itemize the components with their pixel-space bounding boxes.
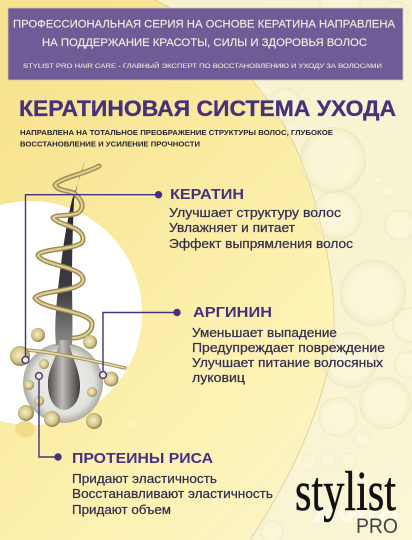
connector: arginine	[100, 310, 180, 378]
block: rice proteins: Придают эластичность	[72, 472, 217, 486]
block: rice proteins	[72, 450, 273, 517]
hair bulb sphere	[23, 343, 103, 423]
hair root	[48, 340, 80, 410]
white circle	[0, 201, 142, 425]
subtitle: ВОССТАНОВЛЕНИЕ И УСИЛЕНИЕ ПРОЧНОСТИ	[20, 140, 200, 148]
gold droplets	[10, 328, 118, 429]
block: keratin: Увлажняет и питает	[169, 221, 295, 235]
header line 1: ПРОФЕССИОНАЛЬНАЯ СЕРИЯ НА ОСНОВЕ КЕРАТИНА НАПРАВЛЕНА	[13, 18, 395, 30]
logo: stylist pro: PRO	[356, 515, 398, 538]
gold strand across bulb	[27, 350, 125, 368]
hair shaft	[55, 160, 85, 345]
block: arginine: луковиц	[192, 371, 245, 385]
rice proteins heading: ПРОТЕИНЫ РИСА	[72, 450, 213, 467]
header line 2: НА ПОДДЕРЖАНИЕ КРАСОТЫ, СИЛЫ И ЗДОРОВЬЯ ВОЛОС	[42, 37, 367, 49]
header line 3: STYLIST PRO HAIR CARE - ГЛАВНЫЙ ЭКСПЕРТ ПО ВОССТАНОВЛЕНИЮ И УХОДУ ЗА ВОЛОСАМИ	[23, 61, 382, 70]
block: rice proteins: Восстанавливают эластичность	[72, 487, 273, 501]
block: arginine: Уменьшает выпадение	[192, 326, 337, 340]
block: keratin	[169, 186, 353, 251]
block: arginine	[192, 304, 385, 385]
block: arginine: Улучшает питание волосяных	[192, 356, 384, 370]
watermark: Avito	[312, 505, 400, 527]
background bubbles	[128, 0, 412, 540]
panel: purple header	[8, 8, 403, 80]
block: keratin: Эффект выпрямления волос	[169, 237, 353, 251]
keratin heading: КЕРАТИН	[170, 186, 244, 203]
block: rice proteins: Придают объем	[72, 503, 171, 517]
title: КЕРАТИНОВАЯ СИСТЕМА УХОДА	[19, 96, 396, 121]
gold spiral	[35, 166, 99, 338]
connector: rice proteins	[36, 373, 61, 460]
subtitle	[20, 128, 333, 148]
block: arginine: Предупреждает повреждение	[192, 341, 385, 355]
block: keratin: Улучшает структуру волос	[169, 206, 341, 220]
arginine heading: АРГИНИН	[193, 304, 272, 321]
subtitle: НАПРАВЛЕНА НА ТОТАЛЬНОЕ ПРЕОБРАЖЕНИЕ СТРУКТУРЫ ВОЛОС, ГЛУБОКОЕ	[20, 128, 333, 137]
connector: keratin	[22, 192, 161, 363]
illustration: hair follicle	[10, 160, 125, 437]
